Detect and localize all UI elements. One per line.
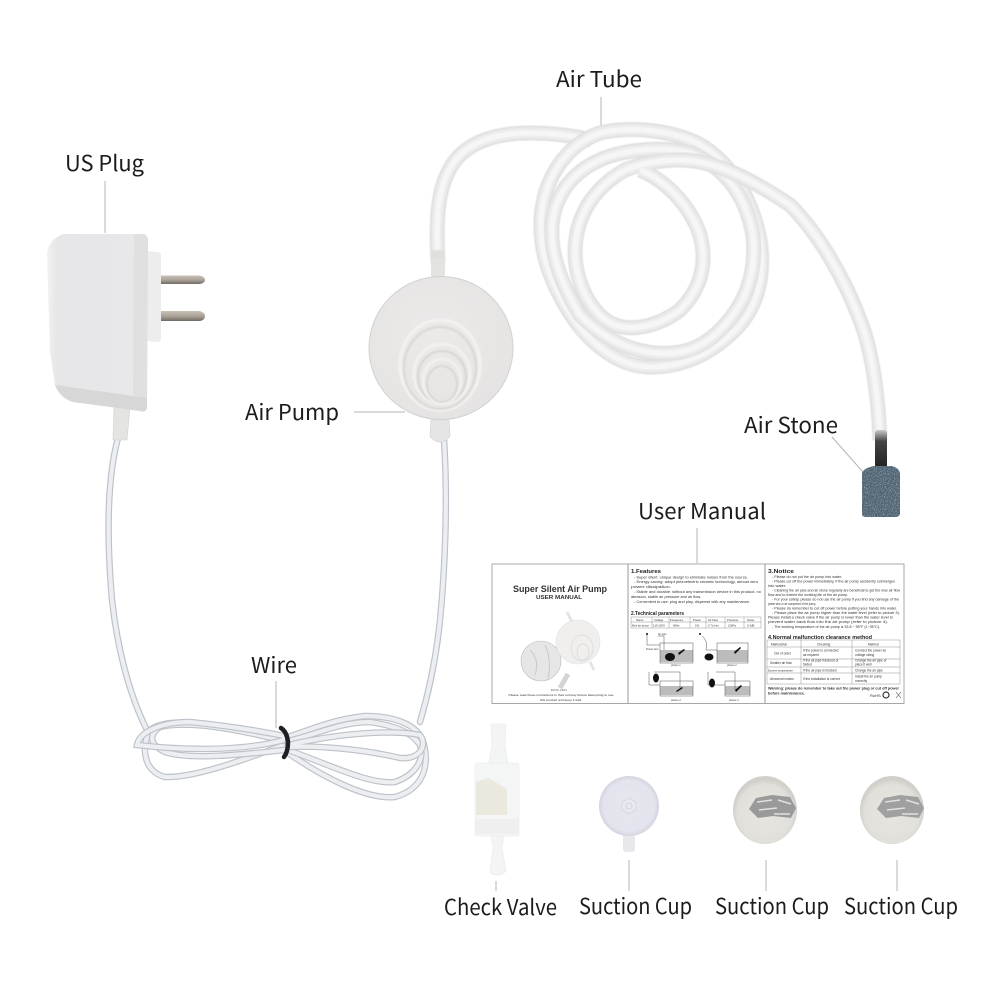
warning text and RoHS mark: RoHS — [870, 693, 881, 698]
top connector — [431, 258, 445, 278]
installation diagrams: Air pipe — [658, 633, 667, 636]
technical parameters table: Name — [636, 618, 644, 622]
label: Air Stone: Air Stone — [744, 408, 838, 440]
manual cover title: Super Silent Air Pump — [513, 584, 607, 594]
malfunction clearance table: correctly — [855, 679, 867, 683]
notice section: - Please do remember to cut off power before putting your hands into water. — [772, 606, 897, 610]
label: Check Valve: Check Valve — [444, 890, 557, 922]
power adapter — [47, 234, 205, 440]
notice section: - Please place the air pump higher than the water level (refer to picture 3). — [772, 611, 900, 615]
features section: - Stable and durable: without any transmission device in this product, no — [634, 590, 761, 594]
label: Air Tube: Air Tube — [556, 62, 642, 94]
malfunction clearance table: Out of order — [774, 652, 792, 656]
technical parameters table: Frequency — [670, 618, 684, 622]
technical parameters table: 12kPa — [728, 624, 736, 628]
pump disc — [369, 276, 513, 420]
malfunction clearance table: 4.Normal malfunction clearance method — [768, 635, 872, 641]
malfunction clearance table: If the installation is correct — [803, 677, 840, 681]
installation diagrams: Power wire — [646, 648, 659, 651]
notice section: - Please cut off the power immediately, if the air pump accidently submerges — [772, 580, 895, 584]
black cable tie — [281, 728, 288, 757]
strain relief — [113, 408, 130, 440]
malfunction clearance table: If the air pipe is blocked — [803, 668, 837, 672]
malfunction clearance table: folded — [803, 662, 812, 666]
wire bundle with tie — [137, 716, 426, 797]
technical parameters table — [631, 611, 761, 628]
label: US Plug — [65, 146, 145, 233]
label: Air Tube — [556, 62, 642, 133]
warning text and RoHS mark — [768, 686, 901, 698]
ripple rings — [400, 320, 480, 410]
suction cup 2 — [733, 776, 797, 844]
user manual sheet — [492, 564, 904, 704]
body bottom band — [55, 385, 147, 412]
installation diagrams: picture 4 — [729, 699, 739, 702]
malfunction clearance table: Method — [868, 642, 879, 646]
suction cup 1 — [599, 776, 659, 852]
notice section: - Please do not put the air pump into water. — [772, 575, 842, 579]
air stone — [862, 430, 900, 517]
features section: - Energy saving: adopt piezoelectric ceramic technology, almost zero — [634, 580, 758, 584]
label: User Manual: User Manual — [638, 494, 766, 526]
technical parameters table: 60Hz — [673, 624, 680, 628]
manual cover footer — [508, 689, 614, 702]
base plate — [147, 251, 161, 342]
label: Suction Cup 2 — [715, 860, 829, 921]
sheet border — [492, 564, 904, 704]
user manual sheet: USER MANUAL — [536, 595, 583, 601]
installation diagrams: picture 1 — [671, 664, 681, 667]
installation diagrams — [646, 633, 750, 702]
malfunction clearance table: Abnormal noises — [770, 677, 794, 681]
technical parameters table: 1W — [695, 624, 700, 628]
label: Air Pump: Air Pump — [245, 395, 339, 427]
technical parameters table: 2.Technical parameters — [631, 611, 684, 617]
label: User Manual — [638, 494, 766, 563]
features section: - Convenient to use: plug and play, dispense with any maintenance. — [634, 600, 750, 604]
air tube coil — [431, 130, 880, 440]
warning text and RoHS mark: before maintenance. — [768, 692, 805, 696]
valve body — [475, 763, 519, 836]
label: Wire: Wire — [251, 648, 297, 680]
technical parameters table: 0.7L/min — [708, 624, 719, 628]
malfunction clearance table: Excess temperature — [768, 668, 793, 672]
malfunction clearance table: Checking — [817, 642, 831, 646]
technical parameters table: 0.3dB — [747, 624, 754, 628]
label: Wire — [251, 648, 297, 728]
warning text and RoHS mark: Warning: please do remember to take out the power plug or cut off power — [768, 686, 900, 690]
stone cylinder — [862, 466, 900, 517]
adapter body — [47, 234, 148, 412]
malfunction clearance table: If the power is connected — [803, 648, 839, 652]
manual pump photo — [521, 612, 600, 688]
technical parameters table: 110-120V — [653, 624, 665, 628]
label: US Plug: US Plug — [65, 146, 145, 178]
notice section: - Cleaning the air pipe and air stone regularly are beneficial to get the max air flow — [772, 588, 901, 592]
features section: abrasion, stable air pressure and air flow. — [631, 595, 701, 599]
label: Suction Cup 2: Suction Cup — [715, 889, 829, 921]
top nipple — [489, 724, 508, 763]
installation diagrams: picture 2 — [727, 664, 737, 667]
malfunction clearance table: Change the air pipe or — [855, 658, 887, 662]
malfunction clearance table: Connect the power as — [855, 648, 886, 652]
notice section: flow and to extend the working life of the air pump. — [768, 593, 848, 597]
bottom connector — [430, 420, 450, 442]
label: Suction Cup 3: Suction Cup — [844, 889, 958, 921]
technical parameters table: Noise — [747, 618, 755, 622]
malfunction clearance table: voltage rating — [855, 653, 874, 657]
features section: 1.Features — [631, 569, 661, 575]
prong top — [160, 276, 205, 284]
white filter — [476, 778, 507, 815]
notice section — [768, 569, 901, 629]
malfunction clearance table: If the air pipe fractured or — [803, 658, 840, 662]
manual cover footer: DC6V-220V — [551, 689, 567, 692]
notice section: power wire or air component of the pump. — [768, 602, 816, 606]
black tube end inside stone — [875, 430, 887, 468]
tube collar at pump — [431, 250, 445, 266]
notice section: - For your safety, please do not use the air pump if you find any damage of the — [772, 598, 899, 602]
check valve — [475, 724, 519, 875]
technical parameters table: Power — [693, 618, 701, 622]
notice section: - The working temperature of the air pump is 33.8 ~ 95°F (1~35°C). — [772, 625, 880, 629]
lower nipple — [490, 835, 506, 875]
malfunction clearance table: Malfunction — [771, 642, 788, 646]
notice section: Please install a check valve if the air pump is lower than the water level to — [768, 616, 893, 620]
installation diagrams: picture 3 — [671, 699, 681, 702]
malfunction clearance table: Install the air pump — [855, 674, 882, 678]
notice section: into water. — [768, 584, 786, 588]
manual cover footer: this product and keep it well. — [540, 698, 582, 702]
label: Air Stone — [744, 408, 863, 472]
technical parameters table: Air Flow — [708, 618, 719, 622]
malfunction clearance table — [767, 635, 900, 684]
manual cover footer: Please read these instructions in their entirety before attempting to use — [508, 693, 614, 697]
technical parameters table: Mini air pump — [632, 624, 649, 628]
malfunction clearance table: Change the air pipe — [855, 668, 883, 672]
label: Suction Cup 1 — [579, 860, 692, 921]
malfunction clearance table: Smaller air flow — [770, 661, 792, 665]
notice section: 3.Notice — [768, 569, 794, 575]
power wire — [109, 438, 446, 728]
notice section: prevent water back flow into the air pump (refer to picture 4). — [768, 620, 888, 624]
features section: - Super silent: unique design to eliminate noises from the source. — [634, 576, 748, 580]
label: Suction Cup 1: Suction Cup — [579, 889, 692, 921]
label: Suction Cup 3 — [844, 860, 958, 921]
technical parameters table: Pressure — [727, 618, 739, 622]
technical parameters table: Voltage — [654, 618, 664, 622]
features section: power dissipation. — [631, 585, 671, 589]
suction cup 3 — [860, 776, 924, 844]
body side shading — [133, 234, 148, 398]
prong bottom — [160, 311, 205, 321]
features section — [631, 569, 761, 604]
air pump — [369, 258, 513, 442]
malfunction clearance table: place it well — [855, 662, 872, 666]
malfunction clearance table: as required — [803, 653, 819, 657]
